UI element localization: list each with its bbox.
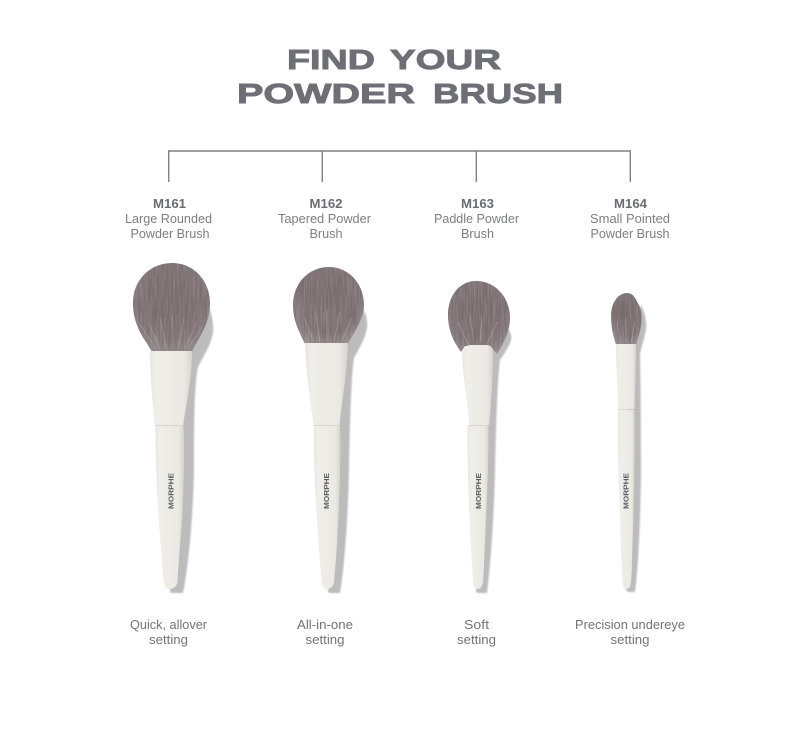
label: M164 use xyxy=(575,617,685,647)
title: YOUR xyxy=(390,44,501,75)
label: M161 name: Large Rounded xyxy=(125,211,212,226)
label: M162 name: M162 xyxy=(310,196,342,211)
column: M164 xyxy=(575,196,685,647)
label: M164 name: Powder Brush xyxy=(590,226,670,241)
title: POWDER xyxy=(237,78,415,109)
title: FIND xyxy=(287,44,375,75)
label: M161 use: Quick, allover xyxy=(130,617,208,632)
label: M163 use: Soft xyxy=(464,617,489,632)
label: M164 name xyxy=(590,196,670,241)
label: M164 use: Precision undereye xyxy=(575,617,685,632)
label: M161 name: M161 xyxy=(153,196,186,211)
label: M162 name xyxy=(278,196,372,241)
column: M161 xyxy=(125,196,213,647)
label: M161 name xyxy=(125,196,212,241)
label: M162 name: Tapered Powder xyxy=(278,211,372,226)
label: M161 name: Powder Brush xyxy=(130,226,210,241)
label: M163 name: M163 xyxy=(461,196,494,211)
connector bracket xyxy=(169,151,630,182)
column: M163 xyxy=(434,196,520,647)
brush: M162 xyxy=(293,267,367,593)
label: M162 name: Brush xyxy=(310,226,342,241)
brand: MORPHE: MORPHE xyxy=(322,473,331,509)
brand: MORPHE: MORPHE xyxy=(622,473,630,509)
brush: M161 xyxy=(133,263,213,593)
label: M161 use: setting xyxy=(149,632,188,647)
brand: MORPHE: MORPHE xyxy=(474,473,483,509)
title xyxy=(237,44,563,109)
label: M163 name: Brush xyxy=(461,226,494,241)
label: M162 use xyxy=(297,617,353,647)
label: M163 name: Paddle Powder xyxy=(434,211,520,226)
brush: M163 xyxy=(448,281,511,593)
label: M162 use: setting xyxy=(306,632,344,647)
brand: MORPHE: MORPHE xyxy=(166,473,176,509)
label: M163 use xyxy=(457,617,496,647)
label: M164 name: M164 xyxy=(614,196,648,211)
label: M164 name: Small Pointed xyxy=(590,211,670,226)
label: M163 name xyxy=(434,196,520,241)
brush: M164 xyxy=(611,293,646,592)
label: M164 use: setting xyxy=(610,632,650,647)
title: BRUSH xyxy=(433,78,563,109)
column: M162 xyxy=(278,196,372,647)
label: M162 use: All-in-one xyxy=(297,617,353,632)
label: M161 use xyxy=(130,617,208,647)
label: M163 use: setting xyxy=(457,632,496,647)
